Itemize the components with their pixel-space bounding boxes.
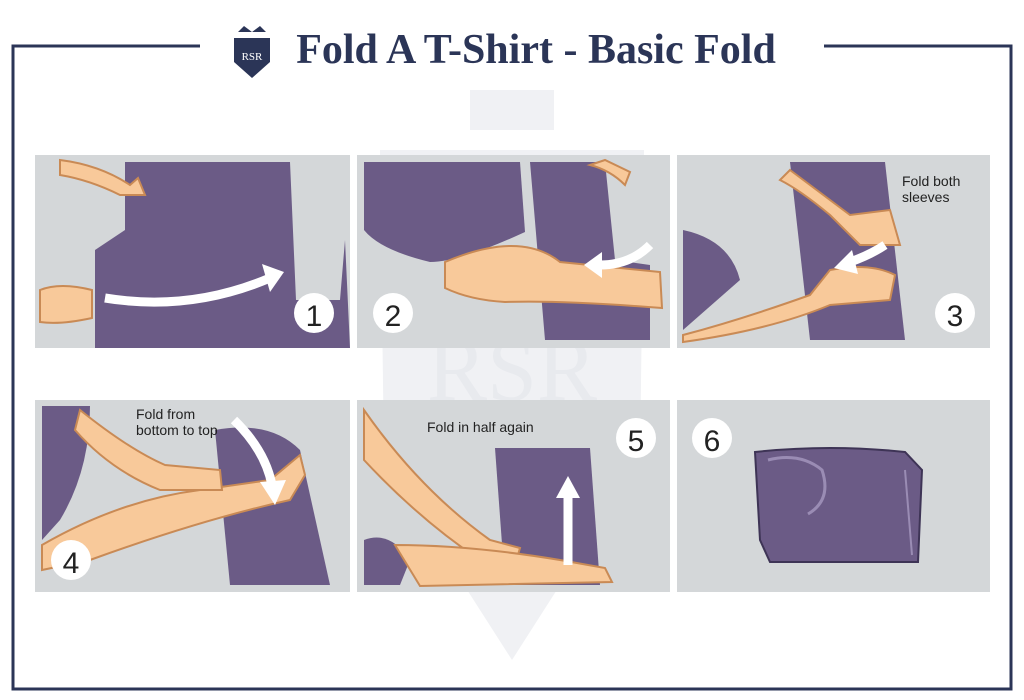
icon: crest: RSR — [242, 51, 263, 63]
callout: sleeves — [902, 189, 949, 205]
callout: Fold in half again — [427, 419, 534, 435]
arrow — [834, 245, 885, 274]
panel 4 — [35, 400, 350, 592]
watermark logo: RSR — [427, 321, 597, 420]
number 4: 4 — [63, 547, 79, 580]
title: Fold A T-Shirt - Basic Fold — [296, 27, 776, 73]
number 5: 5 — [628, 425, 644, 458]
number 2: 2 — [385, 300, 401, 333]
number 4 — [51, 540, 91, 580]
callout: bottom to top — [136, 422, 218, 438]
callout: Fold both — [902, 173, 960, 189]
callout: Fold from — [136, 406, 195, 422]
number 1: 1 — [306, 300, 322, 333]
panel 2 — [357, 155, 670, 348]
number 1 — [294, 293, 334, 333]
number 3 — [935, 293, 975, 333]
panel 3 — [677, 155, 990, 348]
watermark logo — [380, 90, 644, 660]
panel 5 — [357, 400, 670, 592]
number 6: 6 — [704, 425, 720, 458]
panel 1 — [35, 155, 350, 348]
folded shirt — [755, 448, 922, 562]
arrow — [105, 264, 284, 302]
arrow — [556, 476, 580, 565]
panel 6 — [677, 400, 990, 592]
number 3: 3 — [947, 300, 963, 333]
arrow — [234, 420, 286, 505]
arrow — [584, 245, 650, 278]
number 6 — [692, 418, 732, 458]
number 5 — [616, 418, 656, 458]
icon: crest — [234, 26, 270, 78]
number 2 — [373, 293, 413, 333]
